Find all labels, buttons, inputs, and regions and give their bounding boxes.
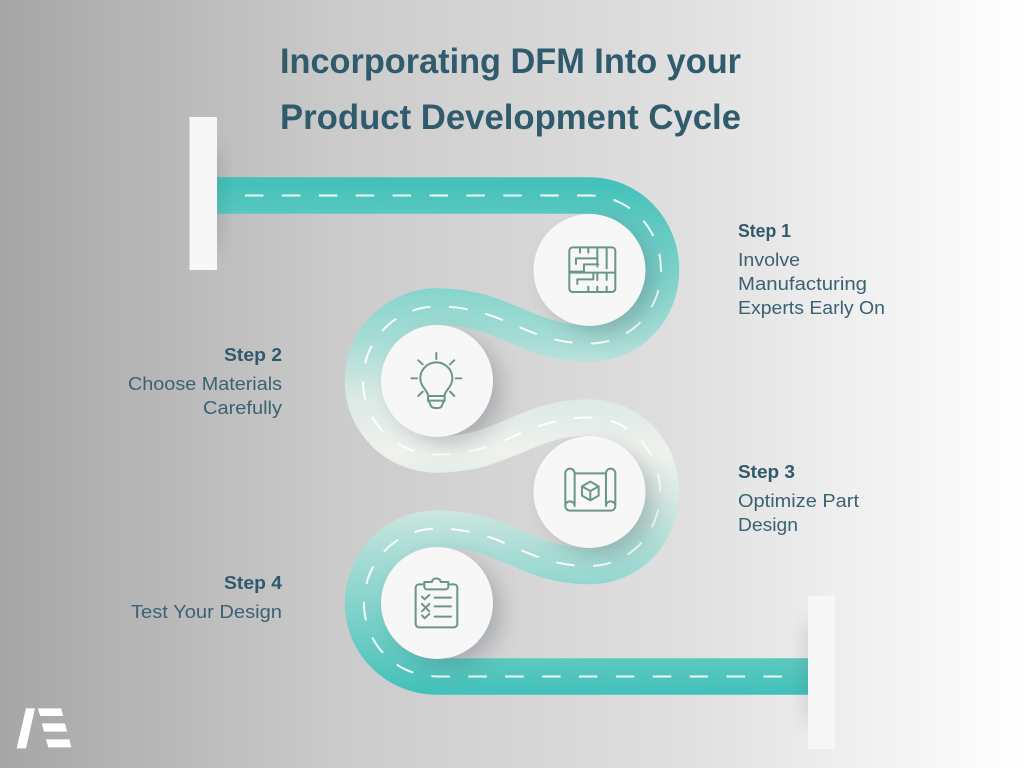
step 1 label: Step 1 [738,221,791,241]
winding road [217,196,808,676]
title [280,42,741,137]
icon: light bulb [411,353,461,408]
step 4 label: Test Your Design [131,602,282,622]
step 1 label: Manufacturing [738,274,867,294]
step 2 label: Choose Materials [128,374,282,394]
step 1 label [738,221,885,318]
step 4 label: Step 4 [224,573,282,593]
step 3 label: Design [738,515,798,535]
step 4 circle with checklist icon [381,547,493,659]
step 2 circle with light bulb icon [381,325,493,437]
step 1 label: Experts Early On [738,298,885,318]
step 3 label: Step 3 [738,462,795,482]
step 2 label: Carefully [203,398,282,418]
step 4 label [131,573,282,622]
step 3 circle with blueprint icon [534,436,646,548]
step 3 label: Optimize Part [738,491,859,511]
step 1 circle with maze icon [534,214,646,326]
step 2 label: Step 2 [224,345,282,365]
step 1 label: Involve [738,250,800,270]
step 2 label [128,345,282,418]
circle and bar shadows [208,150,817,721]
step 3 label [738,462,859,535]
icon: blueprint with cube [565,469,615,511]
title: Product Development Cycle [280,98,741,137]
icon: maze [569,247,615,292]
icon: clipboard checklist [416,578,457,627]
start bar [190,117,217,270]
title: Incorporating DFM Into your [280,42,741,81]
logo [17,708,71,748]
end bar [808,596,835,749]
road centre dashes [245,196,790,676]
